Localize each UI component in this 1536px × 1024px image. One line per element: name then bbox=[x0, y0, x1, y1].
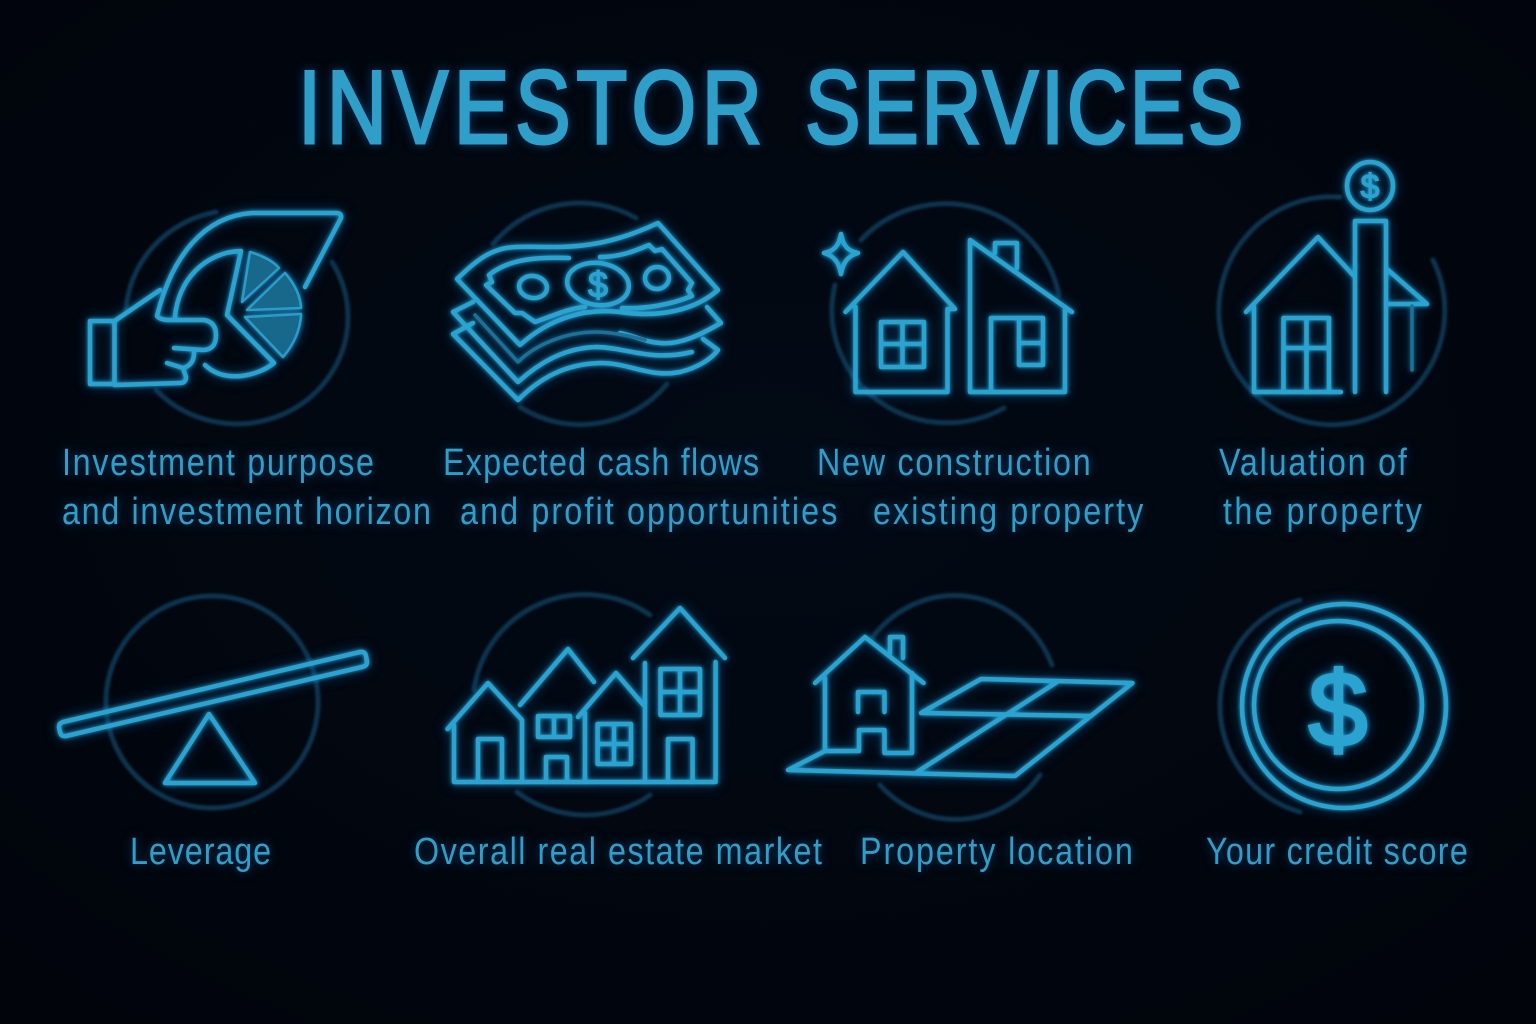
icon: credit score coin bbox=[1220, 600, 1446, 812]
label: leverage: Leverage bbox=[130, 831, 271, 873]
icon: hand holding pie chart bbox=[90, 212, 348, 424]
label: real estate market: Overall real estate market bbox=[414, 831, 822, 873]
icon: stack of cash: $ bbox=[588, 264, 608, 305]
label: property location: Property location bbox=[860, 831, 1133, 873]
label: cash flows bbox=[443, 442, 837, 533]
label: new construction bbox=[817, 442, 1144, 533]
icon: stack of cash bbox=[453, 203, 721, 425]
icon: leverage seesaw bbox=[59, 596, 367, 808]
label: cash flows: Expected cash flows bbox=[443, 442, 759, 484]
label: valuation: the property bbox=[1223, 491, 1422, 533]
label: cash flows: and profit opportunities bbox=[460, 491, 837, 533]
title: INVESTOR bbox=[298, 49, 762, 165]
label: investment purpose: Investment purpose bbox=[62, 442, 374, 484]
label: investment purpose: and investment horizon bbox=[62, 491, 431, 533]
icon: property location plot bbox=[788, 596, 1132, 819]
label: investment purpose bbox=[62, 442, 431, 533]
title: SERVICES bbox=[805, 49, 1243, 165]
label: new construction: New construction bbox=[817, 442, 1091, 484]
icon: property valuation bbox=[1219, 162, 1445, 425]
title bbox=[298, 49, 1243, 165]
icon: neighbourhood houses bbox=[448, 595, 725, 815]
label: valuation bbox=[1219, 442, 1422, 533]
icon: property valuation: $ bbox=[1361, 168, 1380, 206]
label: credit score: Your credit score bbox=[1206, 831, 1468, 873]
icon: credit score coin: $ bbox=[1309, 651, 1367, 769]
label: valuation: Valuation of bbox=[1219, 442, 1407, 484]
label: new construction: existing property bbox=[873, 491, 1144, 533]
icon: new and existing houses bbox=[824, 204, 1072, 423]
